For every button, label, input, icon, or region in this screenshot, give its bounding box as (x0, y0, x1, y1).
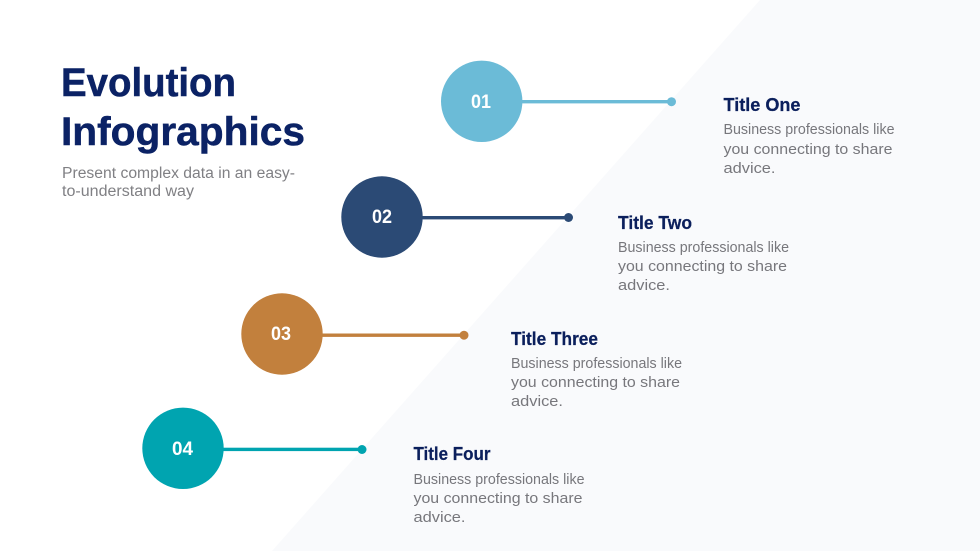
subtitle: to-understand way (62, 183, 194, 200)
description 04: you connecting to share (414, 490, 582, 507)
description 04: Business professionals like (414, 471, 584, 488)
step 01 (441, 61, 894, 177)
heading: Title Two: Title Two (618, 212, 692, 233)
subtitle: Present complex data in an easy- (62, 165, 295, 182)
circle 01 (441, 61, 522, 142)
number 02: 02 (372, 207, 392, 228)
title: Evolution (61, 61, 236, 105)
title (61, 61, 305, 154)
description 01 (724, 121, 894, 177)
connector line 01 (520, 97, 676, 106)
background diagonal panel (272, 0, 980, 551)
title: Infographics (61, 110, 305, 154)
description 03: Business professionals like (511, 355, 682, 372)
description 04 (414, 471, 584, 526)
circle 02 (341, 176, 423, 258)
description 03: you connecting to share (511, 374, 680, 391)
description 04: advice. (414, 509, 466, 526)
circle 03 (241, 293, 323, 375)
circle 04 (142, 408, 224, 489)
description 03: advice. (511, 393, 563, 410)
description 01: advice. (724, 160, 776, 177)
description 03 (511, 355, 682, 410)
heading: Title Four: Title Four (414, 443, 490, 464)
subtitle (62, 165, 295, 200)
description 02: you connecting to share (618, 258, 787, 275)
connector line 04 (220, 445, 366, 454)
description 02: advice. (618, 277, 670, 294)
connector line 02 (420, 213, 573, 222)
connector line 03 (320, 331, 468, 340)
number 01: 01 (471, 92, 491, 113)
step 03 (241, 293, 682, 410)
number 03: 03 (271, 324, 291, 345)
number 04: 04 (172, 439, 193, 460)
description 02 (618, 239, 789, 294)
description 01: you connecting to share (724, 141, 892, 158)
description 02: Business professionals like (618, 239, 789, 256)
heading: Title Three: Title Three (511, 328, 598, 349)
step 02 (341, 176, 789, 294)
step 04 (142, 408, 585, 526)
description 01: Business professionals like (724, 121, 894, 138)
heading: Title One: Title One (724, 94, 800, 115)
